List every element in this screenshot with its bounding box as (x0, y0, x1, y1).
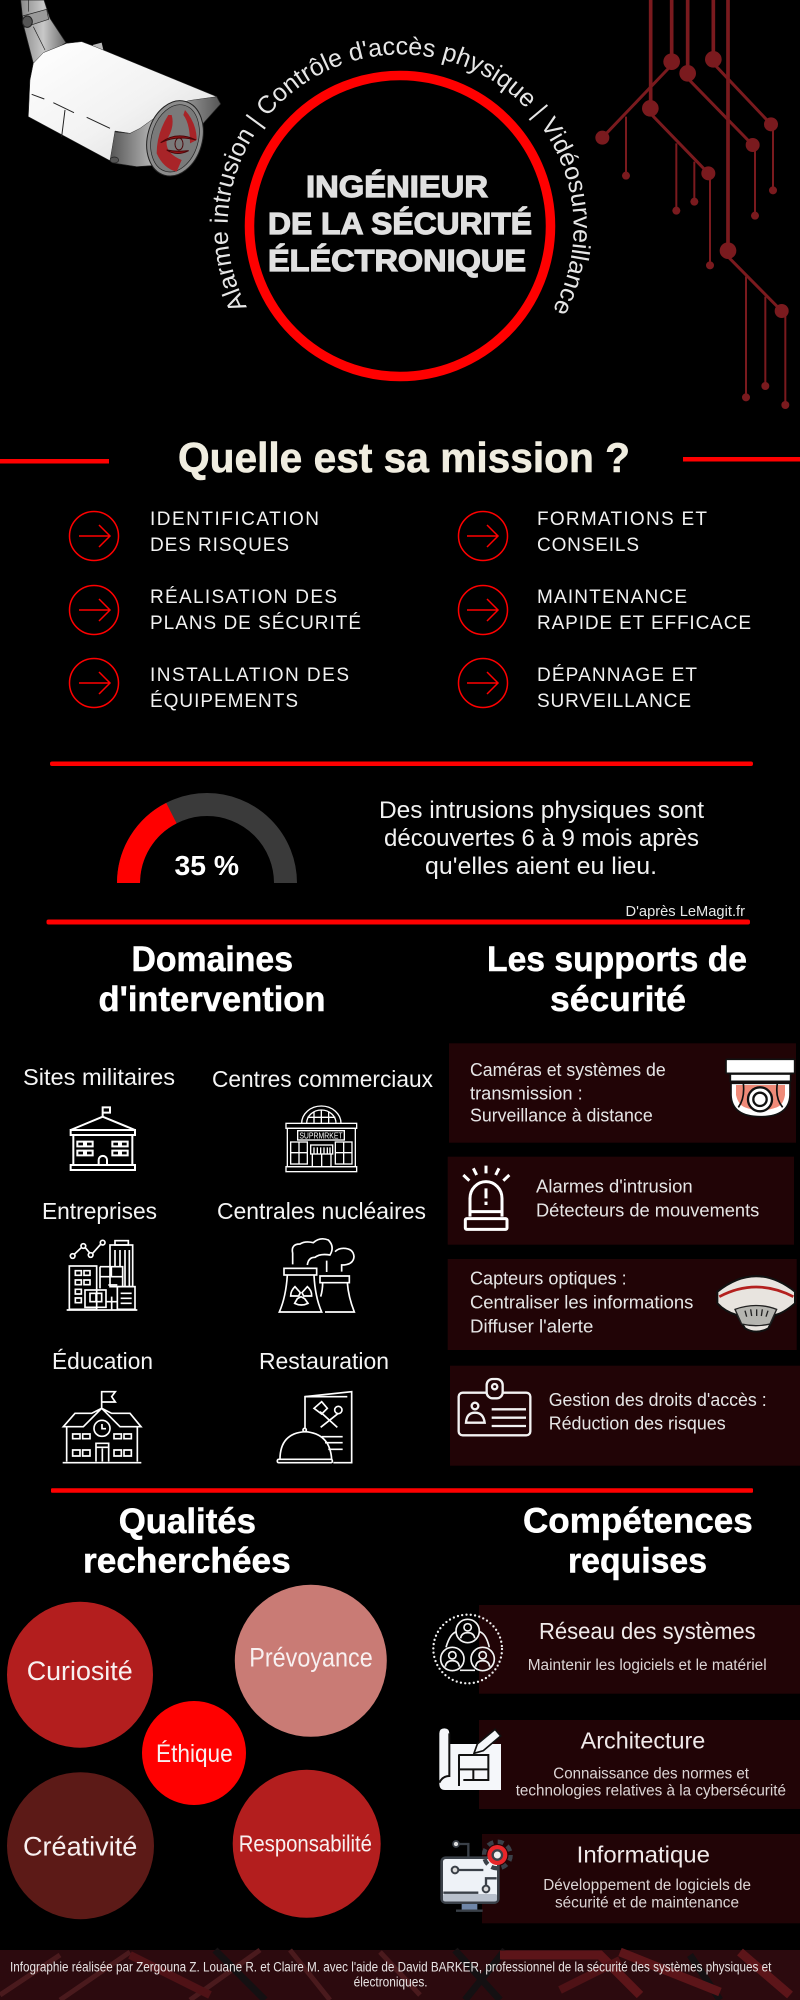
bubble: éthique (142, 1701, 246, 1805)
icon: school (63, 1392, 141, 1463)
panel: architecture: technologies relatives à la cybersécurité (516, 1782, 786, 1799)
panel: réseau (433, 1605, 800, 1694)
bubble: créativité (7, 1772, 154, 1919)
domain labels: Sites militaires (23, 1064, 175, 1090)
panel: optical sensors (448, 1259, 797, 1350)
bubble: prévoyance (235, 1585, 387, 1737)
mission item: CONSEILS (537, 535, 639, 556)
panel: informatique: sécurité et de maintenance (555, 1894, 739, 1911)
mission item: FORMATIONS ET (537, 509, 707, 530)
mission item: MAINTENANCE (537, 587, 687, 608)
bubble: éthique: Éthique (156, 1739, 233, 1768)
heading: supports (487, 940, 747, 1019)
credit text (10, 1960, 772, 1990)
panel: camera systems (449, 1043, 796, 1143)
panel: informatique: Développement de logiciels de (543, 1877, 751, 1894)
heading: domaines: d'intervention (98, 980, 326, 1019)
icon: arrow (70, 512, 118, 560)
panel: optical sensors: Diffuser l'alerte (470, 1316, 593, 1336)
mission heading (0, 434, 800, 481)
heading: supports: Les supports de (487, 940, 747, 979)
gauge chart: 35 % (128, 805, 286, 883)
panel: alarms: Alarmes d'intrusion (536, 1176, 693, 1196)
domain labels: Centres commerciaux (212, 1066, 433, 1092)
icon: supermarket: SUPRMRKET (299, 1131, 343, 1140)
mission item: DÉPANNAGE ET (537, 665, 697, 686)
domain labels: Entreprises (42, 1198, 157, 1224)
icon: arrow (70, 586, 118, 634)
icon: nuclear plant (279, 1239, 354, 1312)
statistic text: qu'elles aient eu lieu. (425, 853, 657, 880)
bubble: responsabilité (233, 1770, 381, 1918)
panel: optical sensors: Centraliser les informations (470, 1292, 693, 1312)
bubble: créativité: Créativité (23, 1832, 137, 1862)
title ring (250, 76, 550, 376)
heading: qualités: recherchées (83, 1542, 291, 1580)
curved subtitle: Alarme intrusion | Contrôle d'accès physique | Vidéosurveillance (210, 36, 591, 314)
heading: domaines (98, 940, 326, 1019)
domain labels: Éducation (52, 1348, 153, 1374)
mission item: IDENTIFICATION (150, 509, 319, 530)
panel: réseau: Réseau des systèmes (539, 1618, 756, 1644)
heading: compétences (523, 1502, 753, 1580)
icon: restaurant (277, 1392, 352, 1463)
mission item: RAPIDE ET EFFICACE (537, 613, 751, 634)
panel: alarms: Détecteurs de mouvements (536, 1201, 759, 1221)
panel: access rights: Gestion des droits d'accès : (549, 1390, 767, 1410)
mission item (150, 665, 349, 712)
mission item: DES RISQUES (150, 535, 289, 556)
mission heading: Quelle est sa mission ? (178, 434, 630, 481)
mission item (537, 509, 707, 556)
icon: dome camera (726, 1059, 795, 1117)
gauge chart: 35 %: 35 % (174, 850, 239, 881)
panel: alarms (448, 1157, 794, 1245)
icon: companies (67, 1240, 137, 1310)
mission item (150, 509, 319, 556)
panel: optical sensors: Capteurs optiques : (470, 1268, 627, 1288)
source: D'après LeMagit.fr (626, 903, 745, 920)
bubble: responsabilité: Responsabilité (239, 1831, 372, 1857)
mission item (537, 587, 751, 634)
domain labels: Centrales nucléaires (217, 1198, 426, 1224)
bubble: curiosité (7, 1602, 153, 1748)
mission item: PLANS DE SÉCURITÉ (150, 613, 361, 634)
mission item: SURVEILLANCE (537, 691, 691, 712)
icon: blueprint (439, 1728, 501, 1790)
icon: security camera (21, 0, 221, 183)
statistic text: découvertes 6 à 9 mois après (384, 825, 699, 852)
mission item (150, 587, 361, 634)
panel: architecture: Architecture (581, 1727, 705, 1753)
title: INGÉNIEUR (306, 169, 488, 204)
icon: computer with gear (442, 1841, 511, 1911)
icon: military site (71, 1107, 135, 1170)
icon: circuit lines (595, 0, 789, 409)
panel: informatique: Informatique (577, 1842, 710, 1868)
panel: réseau: Maintenir les logiciels et le matériel (528, 1657, 767, 1674)
panel: camera systems: Surveillance à distance (470, 1106, 653, 1126)
mission item: INSTALLATION DES (150, 665, 349, 686)
title: ÉLÉCTRONIQUE (268, 243, 526, 278)
panel: domaines (23, 1064, 433, 1463)
icon: network (433, 1615, 502, 1683)
mission list (70, 509, 751, 712)
domain labels: Restauration (259, 1348, 389, 1374)
heading: domaines: Domaines (132, 940, 293, 979)
mission item: RÉALISATION DES (150, 587, 337, 608)
icon: access badge (459, 1379, 530, 1435)
title: DE LA SÉCURITÉ (268, 206, 532, 241)
domain labels (23, 1064, 433, 1374)
panel: access rights: Réduction des risques (549, 1413, 726, 1433)
footer (0, 1950, 800, 2000)
statistic text (379, 797, 704, 880)
panel: informatique (442, 1834, 800, 1923)
panel: access rights (450, 1366, 800, 1466)
icon: alarm light (463, 1166, 509, 1229)
panel: architecture (439, 1720, 800, 1809)
heading: qualités (83, 1502, 291, 1580)
bubble: prévoyance: Prévoyance (249, 1643, 373, 1673)
panel: camera systems: transmission : (470, 1083, 583, 1103)
icon: arrow (458, 658, 508, 708)
heading: compétences: Compétences (523, 1502, 753, 1540)
heading: qualités: Qualités (119, 1502, 256, 1541)
heading: compétences: requises (568, 1542, 707, 1580)
mission item: ÉQUIPEMENTS (150, 691, 298, 712)
icon: supermarket (286, 1106, 357, 1172)
heading: supports: sécurité (550, 980, 686, 1019)
panel: camera systems: Caméras et systèmes de (470, 1060, 666, 1080)
icon: arrow (70, 658, 118, 708)
icon: smoke detector (717, 1276, 795, 1332)
bubble: curiosité: Curiosité (27, 1656, 133, 1686)
icon: arrow (458, 512, 508, 560)
mission item (537, 665, 697, 712)
footer texture (0, 1950, 790, 2000)
icon: arrow (458, 586, 508, 634)
panel: architecture: Connaissance des normes et (553, 1765, 750, 1782)
title (268, 169, 532, 278)
statistic text: Des intrusions physiques sont (379, 797, 704, 824)
credit text: électroniques. (354, 1975, 428, 1990)
